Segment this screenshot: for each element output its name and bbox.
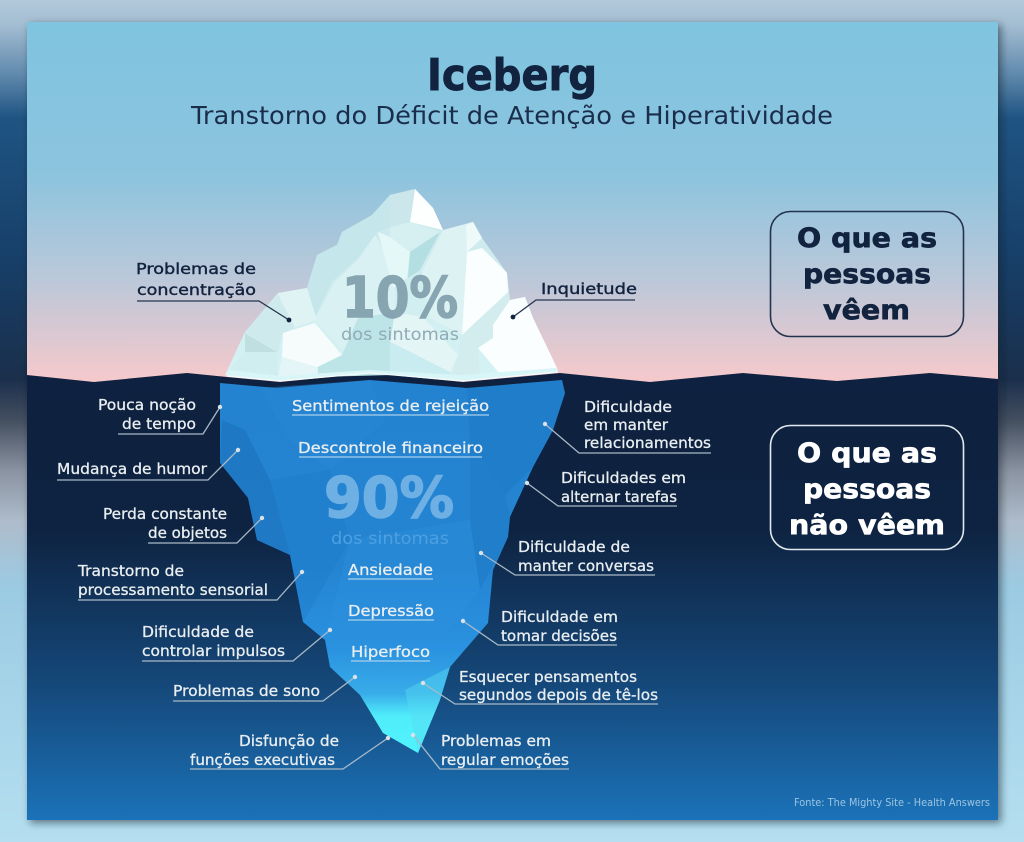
label: esquecer pensamentos: Esquecer pensamentos: [459, 668, 637, 686]
box: o que as pessoas nao veem: pessoas: [803, 474, 931, 505]
label: problemas em regular emocoes: [411, 732, 569, 769]
label: sentimentos de rejeicao: Sentimentos de rejeição: [292, 397, 489, 415]
label: pouca nocao de tempo: Pouca noção: [98, 396, 196, 414]
label: problemas de concentracao: [136, 260, 291, 322]
label: dificuldade em manter relacionamentos: em manter: [584, 416, 669, 434]
label: dificuldade de controlar impulsos: Dificuldade de: [142, 623, 254, 641]
90 percent figure: 90%: [324, 466, 454, 531]
title: Iceberg: [427, 50, 597, 101]
label: perda constante de objetos: [103, 505, 264, 543]
box: o que as pessoas nao veem: O que as: [797, 438, 937, 469]
label: disfuncao de funcoes executivas: Disfunção de: [239, 732, 339, 750]
label: hiperfoco: Hiperfoco: [351, 643, 430, 661]
label: dificuldade em manter relacionamentos: relacionamentos: [584, 434, 711, 452]
label: dificuldade em tomar decisoes: tomar decisões: [501, 627, 617, 645]
label: disfuncao de funcoes executivas: funções executivas: [190, 751, 335, 769]
label: esquecer pensamentos: segundos depois de tê-los: [459, 686, 658, 704]
label: dificuldade de controlar impulsos: [142, 623, 332, 661]
label: depressao: Depressão: [348, 602, 434, 620]
label: dificuldade em manter relacionamentos: Dificuldade: [584, 398, 672, 416]
label: problemas de sono: Problemas de sono: [173, 682, 320, 700]
label: mudanca de humor: Mudança de humor: [57, 460, 208, 478]
10 percent figure: dos sintomas: [341, 325, 459, 345]
label: transtorno de processamento sensorial: Transtorno de: [77, 562, 184, 580]
box: o que as pessoas veem: [770, 212, 964, 336]
label: inquietude: [511, 280, 637, 319]
label: problemas de concentracao: Problemas de: [136, 260, 256, 278]
label: problemas de sono: [173, 675, 357, 701]
label: perda constante de objetos: Perda constante: [103, 505, 227, 523]
label: disfuncao de funcoes executivas: [190, 732, 390, 769]
box: o que as pessoas nao veem: [770, 426, 964, 550]
label: dificuldade de controlar impulsos: controlar impulsos: [142, 642, 285, 660]
label: dificuldades em alternar tarefas: alternar tarefas: [561, 488, 677, 506]
label: inquietude: Inquietude: [541, 280, 637, 298]
label: dificuldade em manter relacionamentos: [543, 398, 711, 453]
label: mudanca de humor: [57, 448, 240, 480]
sea: [27, 373, 998, 820]
source note: Fonte: The Mighty Site - Health Answers: [794, 797, 990, 809]
subtitle: Transtorno do Déficit de Atenção e Hiperatividade: [190, 101, 833, 130]
label: dificuldade de manter conversas: Dificuldade de: [518, 538, 630, 556]
label: problemas de concentracao: concentração: [137, 281, 256, 299]
label: dificuldade de manter conversas: manter conversas: [518, 557, 654, 575]
label: descontrole financeiro: Descontrole financeiro: [298, 439, 483, 457]
label: dificuldade de manter conversas: [479, 538, 655, 575]
box: o que as pessoas nao veem: não vêem: [789, 510, 945, 541]
waterline: [227, 372, 558, 381]
label: ansiedade: Ansiedade: [348, 561, 433, 579]
iceberg below water: [220, 380, 565, 753]
label: dificuldade em tomar decisoes: [461, 608, 618, 645]
label: pouca nocao de tempo: de tempo: [122, 415, 196, 433]
90 percent figure: dos sintomas: [331, 529, 449, 549]
label: esquecer pensamentos: [421, 668, 658, 704]
box: o que as pessoas veem: vêem: [823, 295, 910, 326]
label: transtorno de processamento sensorial: processamento sensorial: [78, 581, 268, 599]
box: o que as pessoas veem: pessoas: [803, 259, 931, 290]
label: transtorno de processamento sensorial: [77, 562, 304, 600]
label: problemas em regular emocoes: Problemas em: [441, 732, 551, 750]
box: o que as pessoas veem: O que as: [797, 223, 937, 254]
label: dificuldades em alternar tarefas: [525, 469, 686, 506]
label: dificuldade em tomar decisoes: Dificuldade em: [501, 608, 618, 626]
label: perda constante de objetos: de objetos: [148, 524, 227, 542]
iceberg above water: [225, 189, 558, 381]
10 percent figure: 10%: [342, 266, 458, 331]
label: problemas em regular emocoes: regular emoções: [441, 751, 569, 769]
label: dificuldades em alternar tarefas: Dificuldades em: [561, 469, 686, 487]
label: pouca nocao de tempo: [98, 396, 222, 434]
